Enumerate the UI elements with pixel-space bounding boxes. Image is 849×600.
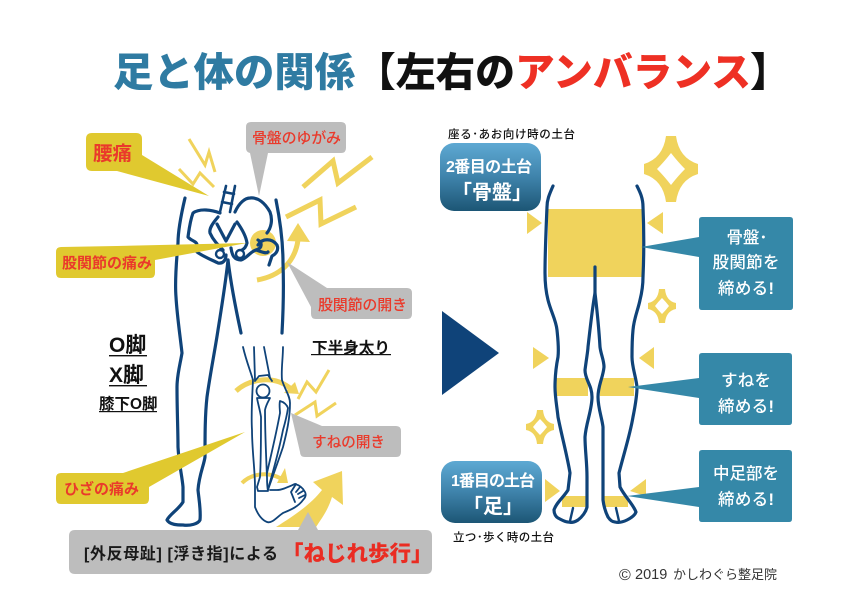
callout: pelvis tighten: 股関節を bbox=[712, 253, 780, 272]
callout: 骨盤のゆがみ: 骨盤のゆがみ bbox=[252, 129, 341, 147]
callout: shin tighten: 締める! bbox=[718, 397, 774, 416]
right figure yellow bands bbox=[527, 209, 663, 507]
panel: second base bbox=[440, 143, 541, 211]
icon: small sparkle upper bbox=[648, 289, 676, 323]
labels: leg types: 膝下O脚 bbox=[99, 395, 158, 413]
left figure: upper body and left leg bbox=[167, 186, 283, 525]
callout: pelvis tighten: 骨盤･ bbox=[726, 228, 768, 247]
title bbox=[113, 51, 790, 95]
title: アンバランス bbox=[515, 51, 751, 95]
label: 下半身太り: 下半身太り bbox=[312, 339, 390, 357]
callout: ひざの痛み: ひざの痛み bbox=[64, 480, 139, 498]
copyright: かしわぐら整足院 bbox=[673, 567, 777, 582]
title: 【左右の bbox=[356, 51, 515, 95]
labels: leg types: X脚 bbox=[109, 364, 144, 387]
callout: pelvis tighten: 締める! bbox=[718, 279, 774, 298]
callout: すねの開き: すねの開き bbox=[312, 434, 385, 451]
panel: first base: 「足」 bbox=[463, 495, 523, 518]
callout: midfoot tighten: 締める! bbox=[718, 490, 774, 509]
label: standing base caption: 立つ･歩く時の土台 bbox=[453, 530, 554, 544]
callout: midfoot tighten: 中足部を bbox=[713, 464, 779, 483]
callout: 腰痛 bbox=[86, 133, 209, 196]
copyright bbox=[619, 567, 777, 584]
panel: second base: 2番目の土台 bbox=[446, 157, 532, 176]
arrow: big navy triangle bbox=[442, 311, 499, 395]
callout: shin tighten bbox=[628, 353, 792, 425]
callout: shin tighten: すねを bbox=[721, 371, 771, 390]
callout: 股関節の開き: 股関節の開き bbox=[318, 296, 407, 314]
callout: 腰痛: 腰痛 bbox=[93, 142, 132, 165]
panel: first base: 1番目の土台 bbox=[451, 471, 535, 490]
copyright: 2019 bbox=[635, 567, 667, 583]
callout: 骨盤のゆがみ bbox=[246, 122, 346, 196]
callout: ひざの痛み bbox=[56, 432, 245, 504]
left figure yellow accents bbox=[179, 139, 372, 527]
title: 足と体の関係 bbox=[113, 51, 355, 95]
callout: 股関節の痛み: 股関節の痛み bbox=[62, 254, 152, 272]
icon: small sparkle lower bbox=[526, 410, 554, 444]
panel: first base bbox=[441, 461, 542, 523]
callout: ねじれ歩行 bbox=[69, 512, 433, 574]
callout: midfoot tighten bbox=[627, 450, 792, 522]
panel: second base: 「骨盤」 bbox=[452, 181, 532, 204]
icon: pelvis bones bbox=[188, 198, 278, 265]
right figure: corrected legs bbox=[545, 186, 644, 522]
callout: すねの開き bbox=[291, 413, 401, 457]
labels: leg types: O脚 bbox=[109, 334, 146, 357]
lower leg with bones bbox=[243, 347, 306, 522]
labels: leg types bbox=[99, 334, 158, 413]
label: seated base caption: 座る･あお向け時の土台 bbox=[448, 127, 576, 141]
callout: 股関節の開き bbox=[287, 262, 412, 319]
copyright: © bbox=[619, 567, 631, 584]
callout: ねじれ歩行: 「ねじれ歩行」 bbox=[282, 541, 433, 566]
icon: large sparkle bbox=[644, 136, 698, 202]
title: 】 bbox=[750, 51, 790, 95]
callout: ねじれ歩行: [外反母趾] [浮き指]による bbox=[84, 544, 278, 563]
callout: pelvis tighten bbox=[641, 217, 793, 310]
callout: 股関節の痛み bbox=[56, 243, 247, 278]
